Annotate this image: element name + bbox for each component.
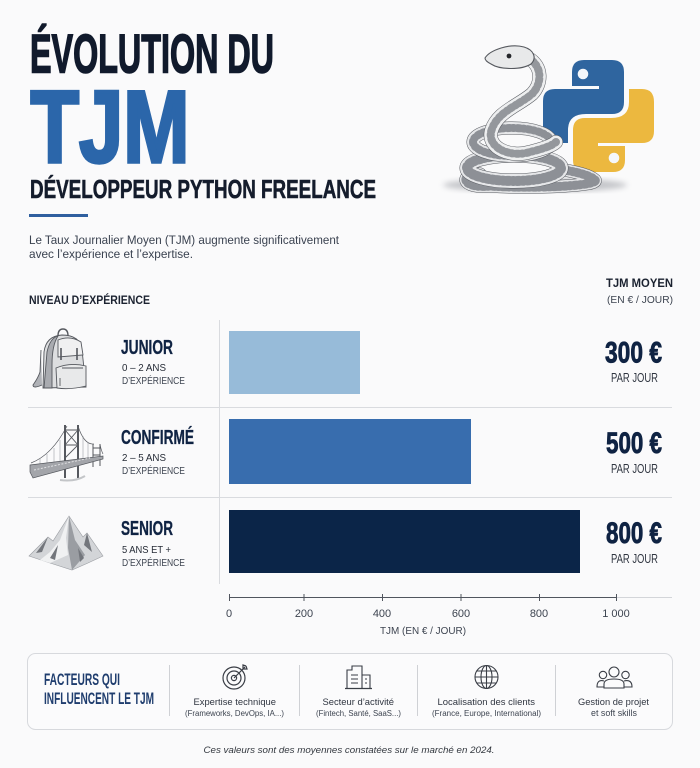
experience: senior: 5 ANS ET + — [122, 545, 171, 556]
axis tick labels: 0 — [226, 608, 232, 620]
icon: team — [597, 667, 632, 688]
factor: sector: (Fintech, Santé, SaaS...) — [316, 709, 401, 718]
factor: location: Localisation des clients — [438, 697, 535, 708]
level name: confirmé: CONFIRMÉ — [121, 426, 194, 449]
experience: junior: 0 – 2 ANS — [122, 363, 166, 374]
experience: senior — [122, 545, 185, 569]
experience: confirmé — [122, 453, 185, 477]
intro paragraph: Le Taux Journalier Moyen (TJM) augmente significativement — [29, 233, 340, 247]
axis tick labels: 200 — [295, 608, 313, 620]
value: senior: PAR JOUR — [611, 551, 658, 566]
title line: Évolution du: ÉVOLUTION DU — [30, 22, 274, 84]
experience: senior: D’EXPÉRIENCE — [122, 556, 185, 569]
panel heading: INFLUENCENT LE TJM — [44, 689, 154, 708]
icon: coiled snake — [466, 46, 595, 187]
value: confirmé — [606, 427, 662, 476]
value: junior: 300 € — [605, 336, 662, 370]
bar: senior — [229, 510, 580, 573]
row: senior — [29, 510, 662, 573]
intro paragraph — [29, 233, 340, 261]
factor: sector: Secteur d’activité — [322, 697, 394, 708]
factor: location: (France, Europe, International) — [432, 709, 541, 718]
title block — [30, 22, 376, 204]
panel heading — [44, 670, 154, 708]
panel: factors — [28, 654, 672, 730]
factor: expertise: Expertise technique — [194, 697, 276, 708]
icon: buildings — [345, 666, 372, 688]
experience: confirmé: D’EXPÉRIENCE — [122, 464, 185, 477]
value: senior: 800 € — [606, 517, 662, 550]
footnote: Ces valeurs sont des moyennes constatées sur le marché en 2024. — [204, 745, 494, 756]
accent rule — [29, 214, 88, 217]
chart axis — [226, 594, 672, 637]
subtitle: DÉVELOPPEUR PYTHON FREELANCE — [30, 174, 376, 204]
illustration: snake and Python logo — [443, 46, 654, 192]
title line: TJM: TJM — [30, 70, 190, 184]
value: junior: PAR JOUR — [611, 370, 658, 385]
icon: mountain — [29, 516, 103, 570]
panel heading: FACTEURS QUI — [44, 670, 120, 689]
ground shadow — [443, 178, 627, 192]
bar: confirmé — [229, 419, 471, 484]
value: confirmé: 500 € — [606, 427, 662, 460]
value: confirmé: PAR JOUR — [611, 461, 658, 476]
axis title: TJM (EN € / JOUR) — [380, 625, 466, 637]
axis tick labels: 800 — [530, 608, 548, 620]
icon: target — [223, 665, 247, 689]
factor: soft skills: Gestion de projet — [578, 697, 649, 708]
level name: senior: SENIOR — [121, 518, 173, 540]
icon: backpack — [33, 329, 86, 389]
factor: expertise — [185, 665, 284, 718]
icon: Python logo — [543, 60, 654, 172]
icon: suspension bridge — [30, 425, 103, 480]
level name: junior: JUNIOR — [121, 337, 173, 359]
factor: location — [432, 666, 541, 718]
axis tick labels: 1 000 — [602, 608, 630, 620]
factor: expertise: (Frameworks, DevOps, IA...) — [185, 709, 284, 718]
icon: globe — [475, 666, 498, 688]
axis tick labels — [226, 608, 630, 620]
experience: junior — [122, 363, 185, 387]
intro paragraph: avec l’expérience et l’expertise. — [29, 247, 193, 261]
column header: TJM moyen: (EN € / JOUR) — [607, 294, 673, 306]
bar: junior — [229, 331, 360, 394]
column header: TJM moyen: TJM MOYEN — [606, 278, 673, 290]
factor: soft skills — [578, 667, 649, 718]
factor: sector — [316, 666, 401, 718]
axis tick labels: 400 — [373, 608, 391, 620]
column header: niveau d'expérience: NIVEAU D’EXPÉRIENCE — [29, 294, 150, 307]
row: confirmé — [30, 419, 662, 484]
column header: TJM moyen — [606, 278, 673, 306]
factor: soft skills: et soft skills — [591, 708, 637, 718]
value: junior — [605, 336, 662, 385]
experience: confirmé: 2 – 5 ANS — [122, 453, 166, 464]
value: senior — [606, 517, 662, 566]
experience: junior: D’EXPÉRIENCE — [122, 374, 185, 387]
row: junior — [33, 329, 662, 394]
axis tick labels: 600 — [452, 608, 470, 620]
